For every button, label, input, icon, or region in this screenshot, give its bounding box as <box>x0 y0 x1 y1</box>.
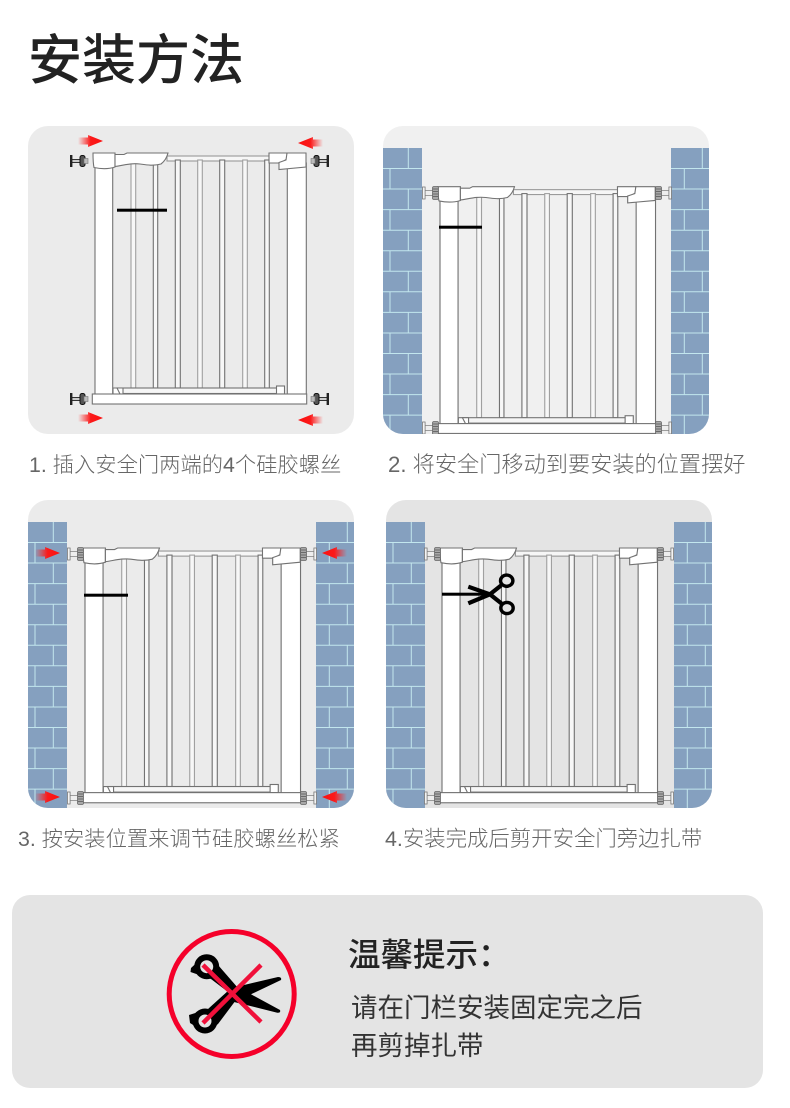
arrows <box>78 135 323 426</box>
strap being cut <box>442 593 488 596</box>
panel: step 3 illustration <box>28 500 354 808</box>
panel: step 1 illustration <box>28 126 354 434</box>
brick walls <box>383 148 709 434</box>
strap <box>117 209 167 212</box>
screws <box>68 548 316 804</box>
gate <box>82 548 301 803</box>
caption 3: 3. 按安装位置来调节硅胶螺丝松紧 <box>18 827 340 851</box>
caption 2: 2. 将安全门移动到要安装的位置摆好 <box>388 452 745 477</box>
title: 安装方法 <box>28 31 244 91</box>
screws <box>70 155 329 405</box>
gate <box>439 548 658 803</box>
gate <box>92 153 307 404</box>
gate <box>437 187 656 433</box>
panel: step 2 illustration <box>383 126 709 434</box>
arrows <box>35 547 347 803</box>
screws <box>422 186 672 434</box>
strap <box>84 594 128 597</box>
tip text: 请在门栏安装固定完之后 <box>351 993 642 1023</box>
caption 4: 4.安装完成后剪开安全门旁边扎带 <box>385 827 702 851</box>
icon: scissors <box>468 575 513 614</box>
panel: step 4 illustration <box>386 500 712 808</box>
brick walls <box>28 522 354 808</box>
tip text: 再剪掉扎带 <box>351 1031 484 1061</box>
screws <box>424 548 674 804</box>
tip text <box>351 993 642 1061</box>
panel: warm tip <box>12 895 763 1088</box>
strap <box>439 226 482 229</box>
tip heading: 温馨提示： <box>348 937 511 973</box>
brick walls <box>386 522 712 808</box>
icon: no scissors <box>166 929 297 1059</box>
caption 1: 1. 插入安全门两端的4个硅胶螺丝 <box>29 453 341 477</box>
